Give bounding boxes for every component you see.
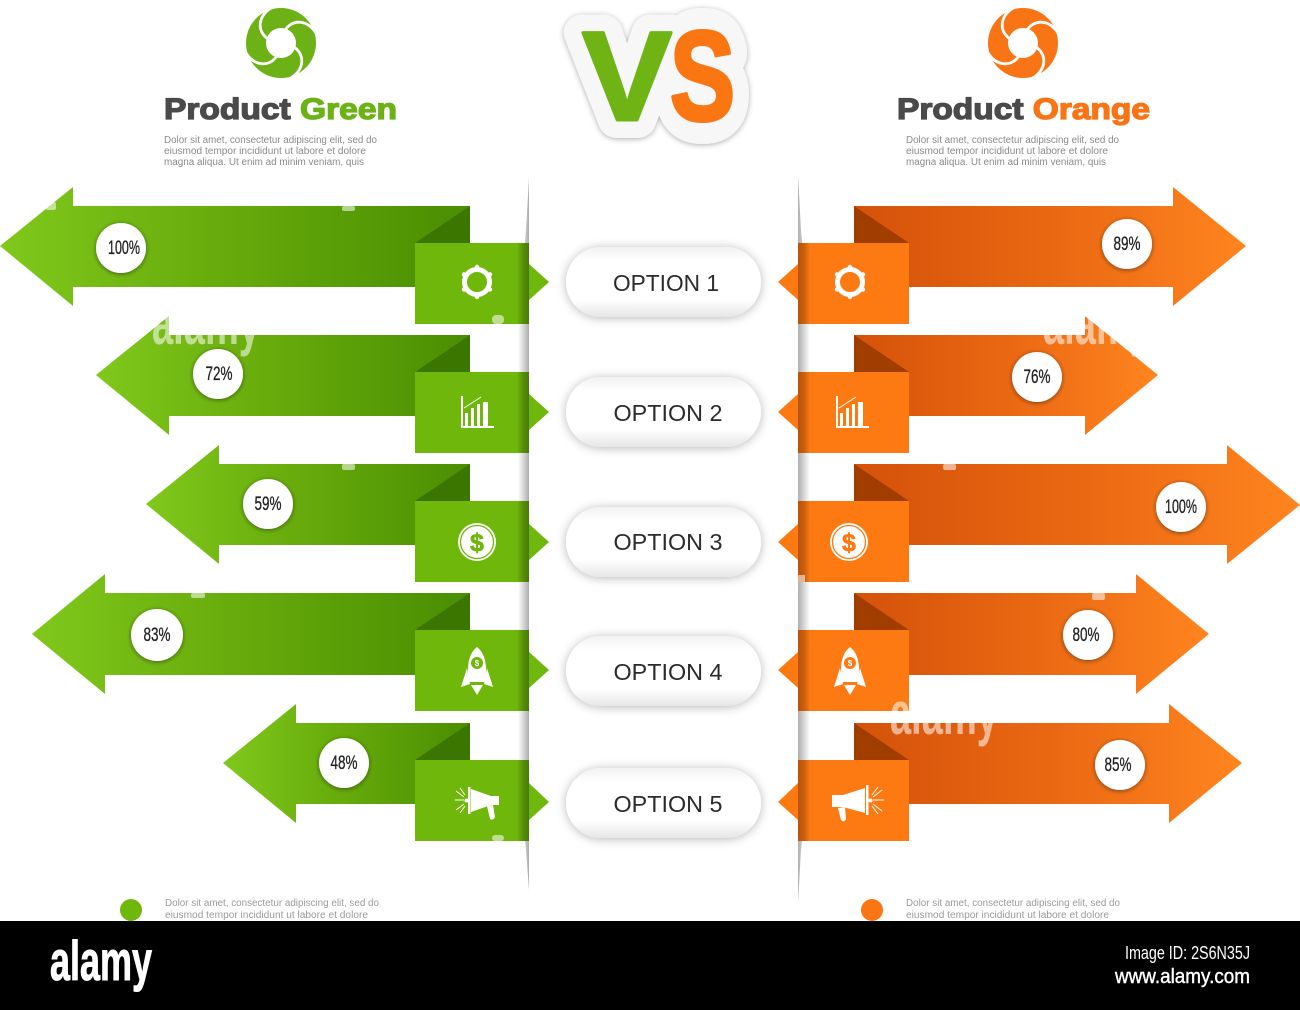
footer note: green (120, 898, 379, 921)
arrow: orange 89% (854, 187, 1246, 306)
icon: rocket (461, 647, 493, 695)
icon: dollar coin: $ (470, 529, 484, 557)
text block: product green: magna aliqua. Ut enim ad minim veniam, quis (164, 157, 364, 168)
pointer (778, 394, 798, 430)
icon tile (798, 372, 909, 453)
arrow: green 48% (223, 704, 470, 823)
icon: rocket: $ (475, 659, 480, 668)
text block: product green: Dolor sit amet, consectetur adipiscing elit, sed do (164, 135, 377, 146)
value: 76%: 76% (1024, 367, 1051, 388)
value: 59%: 59% (254, 494, 282, 515)
footer note: green: eiusmod tempor incididunt ut labore et dolore (165, 910, 368, 921)
row 3 orange (778, 445, 1300, 582)
row 4 green (32, 574, 549, 711)
option 2 (566, 377, 761, 447)
fold (854, 464, 909, 501)
fold (415, 464, 470, 501)
site url: www.alamy.com (1114, 966, 1250, 988)
value: 100%: 100% (1165, 497, 1197, 518)
fold (854, 593, 909, 630)
text block: product green: eiusmod tempor incididunt ut labore et dolore (164, 146, 366, 157)
option 5 (566, 768, 761, 838)
logo: product green (245, 7, 317, 79)
badge: VS: S (670, 5, 735, 147)
row 1 green (0, 187, 549, 324)
text block: product orange: eiusmod tempor incididunt ut labore et dolore (906, 146, 1108, 157)
icon: megaphone (832, 785, 884, 821)
pointer (778, 264, 798, 300)
value: 48%: 48% (330, 753, 358, 774)
option 1: OPTION 1 (613, 270, 719, 296)
stock watermark fragments: alamy (890, 680, 998, 747)
fold (854, 335, 909, 372)
badge: VS: V (582, 5, 672, 147)
icon tile (415, 760, 529, 841)
pointer (778, 524, 798, 560)
logo: product orange (987, 7, 1059, 79)
row 2 orange (778, 316, 1158, 453)
pointer (529, 264, 549, 300)
row 5 orange (778, 704, 1242, 841)
fold (415, 335, 470, 372)
arrow: green 83% (32, 574, 470, 694)
icon tile (798, 243, 909, 324)
icon tile (798, 630, 909, 711)
stock watermark fragments (46, 202, 1255, 841)
option 1 (566, 247, 761, 317)
arrow: green 100% (0, 187, 470, 306)
option 4 (566, 636, 761, 706)
icon tile (415, 501, 529, 582)
pointer (529, 394, 549, 430)
footer note: green: Dolor sit amet, consectetur adipiscing elit, sed do (165, 898, 379, 909)
icon: gear (835, 265, 865, 299)
footer note: orange: eiusmod tempor incididunt ut labore et dolore (906, 910, 1109, 921)
icon tile (415, 372, 529, 453)
option 3: OPTION 3 (614, 529, 722, 555)
icon: dollar coin (830, 523, 868, 561)
stock watermark fragments: alamy (152, 290, 260, 357)
arrow: green 59% (146, 445, 470, 564)
value: 80%: 80% (1072, 625, 1100, 646)
fold (415, 723, 470, 760)
fold (854, 206, 909, 243)
badge: VS: S (670, 5, 735, 147)
value: 89% (1102, 219, 1152, 269)
arrow: green 72% (96, 316, 470, 435)
pointer (529, 524, 549, 560)
arrow: orange 85% (854, 704, 1242, 823)
icon: rocket (834, 647, 866, 695)
icon: dollar coin: $ (842, 529, 856, 557)
row 3 green (146, 445, 549, 582)
value: 100%: 100% (108, 238, 140, 259)
value: 100% (1156, 482, 1206, 532)
value: 85% (1095, 740, 1145, 790)
image id: Image ID: 2S6N35J (1125, 943, 1250, 963)
fold (415, 206, 470, 243)
footer note: orange: Dolor sit amet, consectetur adipiscing elit, sed do (906, 898, 1120, 909)
pointer (778, 652, 798, 688)
text block: product orange: magna aliqua. Ut enim ad minim veniam, quis (906, 157, 1106, 168)
icon tile (798, 760, 909, 841)
icon tile (415, 243, 529, 324)
arrow: orange 80% (854, 574, 1209, 694)
value: 83%: 83% (144, 625, 171, 646)
option 5: OPTION 5 (614, 791, 722, 817)
option 3 (566, 507, 761, 577)
value: 72% (193, 349, 243, 399)
row 5 green (223, 704, 549, 841)
badge: VS: V (582, 5, 672, 147)
icon tile (798, 501, 909, 582)
icon tile (415, 630, 529, 711)
pointer (529, 652, 549, 688)
pointer (778, 783, 798, 820)
badge: VS (582, 5, 735, 147)
value: 76% (1012, 352, 1062, 402)
stock image footer bar (0, 921, 1300, 1010)
value: 59% (243, 479, 293, 529)
value: 72%: 72% (206, 364, 233, 385)
row 1 orange (778, 187, 1246, 324)
heading: product green: Product Green (164, 93, 397, 126)
option 2: OPTION 2 (614, 400, 722, 426)
value: 89%: 89% (1114, 234, 1141, 255)
option 4: OPTION 4 (614, 659, 723, 685)
pointer (529, 783, 549, 820)
row 2 green (96, 316, 549, 453)
text block: product orange: Dolor sit amet, consectetur adipiscing elit, sed do (906, 135, 1119, 146)
value: 85%: 85% (1104, 755, 1132, 776)
arrow: orange 76% (854, 316, 1158, 435)
panel: centre divider shadows (518, 175, 810, 903)
value: 83% (131, 609, 183, 661)
icon: bar chart (836, 396, 869, 428)
icon: megaphone (455, 787, 499, 820)
text block: product orange (906, 135, 1119, 168)
fold (415, 593, 470, 630)
icon: gear (462, 265, 492, 299)
icon: dollar coin (458, 523, 496, 561)
icon: rocket: $ (848, 659, 853, 668)
value: 48% (319, 738, 369, 788)
arrow: orange 100% (854, 445, 1300, 564)
fold (854, 723, 909, 760)
row 4 orange (778, 574, 1209, 711)
value: 80% (1063, 610, 1113, 660)
footer note: orange (861, 898, 1120, 921)
text block: product green (164, 135, 377, 168)
icon: bar chart (461, 396, 494, 428)
value: 100% (96, 223, 146, 273)
stock watermark fragments: alamy (1043, 290, 1151, 357)
heading: product orange: Product Orange (897, 93, 1150, 126)
alamy wordmark: alamy (50, 929, 152, 992)
